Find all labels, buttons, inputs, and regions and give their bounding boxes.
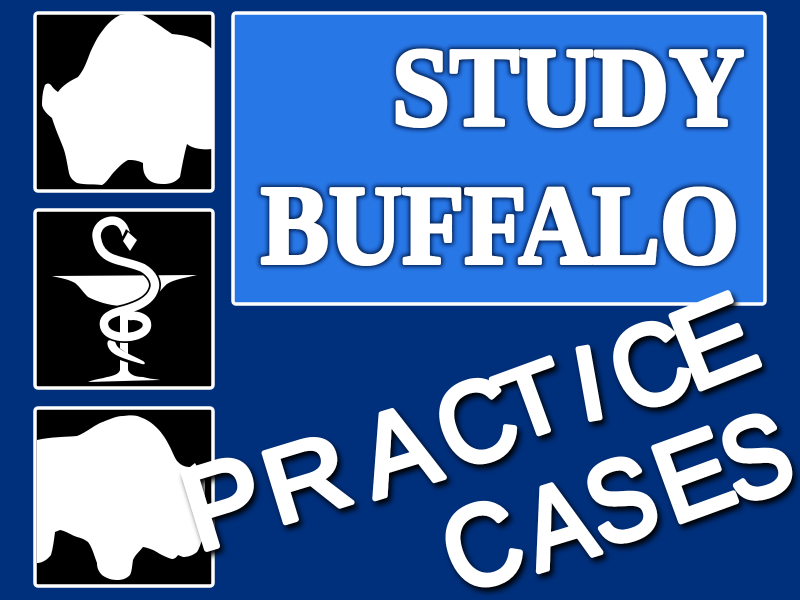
panel: bowl of hygieia [35,210,213,388]
heading: CASES: E [637,403,749,548]
heading: PRACTICE: R [248,409,364,547]
icon: bowl and snake [52,221,197,382]
heading: PRACTICE: I [565,324,613,444]
heading: STUDY: STUDY [392,26,744,150]
heading: PRACTICE: A [345,378,452,522]
heading: BUFFALO: BUFFALO [261,164,739,288]
heading: CASES [425,386,800,600]
panel: title box [233,13,765,304]
heading: CASES: S [570,429,672,571]
heading: PRACTICE: T [482,338,583,464]
heading: PRACTICE: C [418,350,535,496]
heading: PRACTICE: P [167,429,279,576]
heading: PRACTICE: E [653,268,773,415]
panel: bottom buffalo [35,408,213,586]
icon: buffalo facing left [42,14,212,185]
heading: CASES: A [508,453,609,595]
heading: PRACTICE [167,268,773,576]
heading: PRACTICE: C [592,293,709,439]
panel: top buffalo [35,13,213,191]
icon: buffalo facing right [37,415,205,580]
